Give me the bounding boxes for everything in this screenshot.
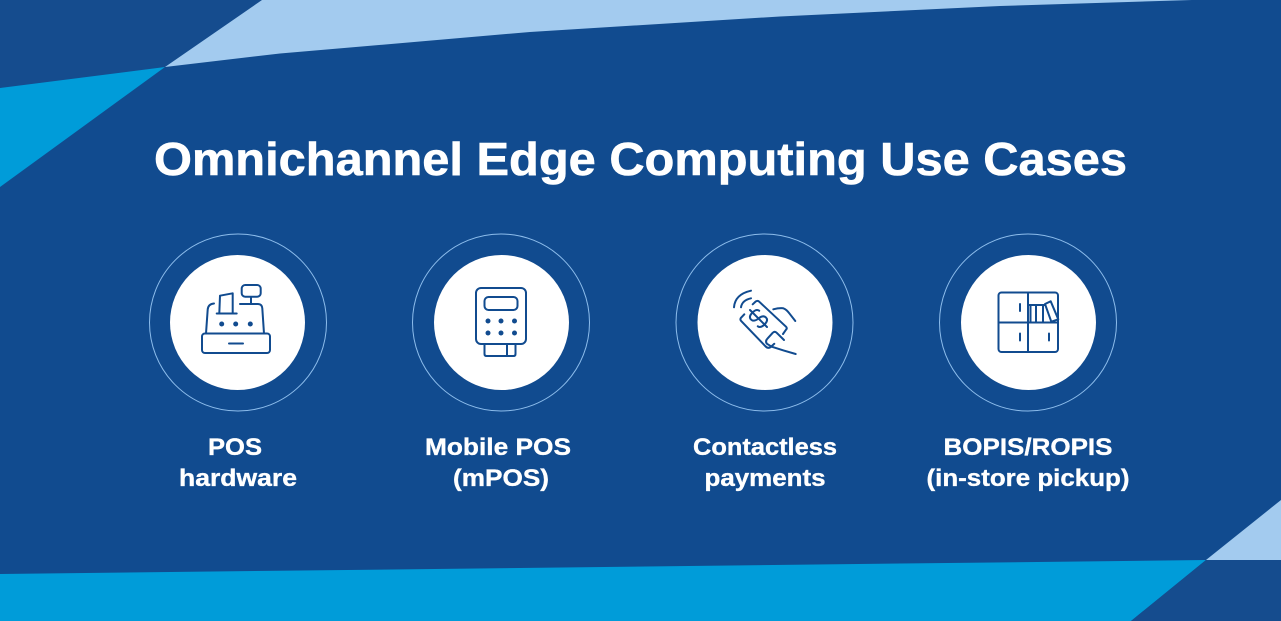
icon disc: Contactless payments [698, 255, 832, 390]
icon: cash register [202, 285, 270, 353]
decorative top-left cyan wedge [0, 67, 165, 187]
icon ring: Contactless payments [676, 234, 853, 411]
keypad dots: cash register [219, 322, 253, 326]
icon: card terminal [476, 288, 526, 356]
label: POS hardware: POS [208, 434, 262, 461]
panel: Contactless payments [676, 234, 853, 492]
icon disc: Mobile POS [434, 255, 569, 390]
icon: hand with contactless card [734, 291, 796, 354]
keypad dots: card terminal [486, 318, 517, 336]
icon: shelving with books [998, 292, 1058, 352]
decorative top-left dark triangle [0, 0, 262, 88]
label: BOPIS/ROPIS: BOPIS/ROPIS [944, 434, 1112, 461]
label: Mobile POS: Mobile POS [425, 434, 571, 461]
label line 2: mPOS: (mPOS) [453, 465, 549, 492]
label line 2: POS hardware: hardware [179, 465, 297, 492]
decorative bottom-right dark shape [1131, 560, 1281, 621]
icon disc: POS hardware [170, 255, 305, 390]
label line 2: in-store pickup: (in-store pickup) [926, 465, 1130, 492]
title: Omnichannel Edge Computing Use Cases [154, 133, 1127, 185]
icon ring: Mobile POS [412, 234, 590, 411]
panel: Mobile POS [412, 234, 590, 492]
icon ring: POS hardware [150, 234, 326, 411]
decorative bottom cyan band [0, 560, 1206, 621]
label: Contactless: Contactless [693, 434, 837, 461]
decorative bottom-right light triangle [1206, 500, 1281, 560]
decorative top light blue wedge [165, 0, 1192, 67]
label line 2: payments: payments [704, 465, 826, 492]
panel: POS hardware [150, 234, 326, 492]
panel: BOPIS/ROPIS [926, 234, 1130, 492]
icon ring: BOPIS/ROPIS [940, 234, 1116, 411]
icon disc: BOPIS/ROPIS [961, 255, 1096, 390]
